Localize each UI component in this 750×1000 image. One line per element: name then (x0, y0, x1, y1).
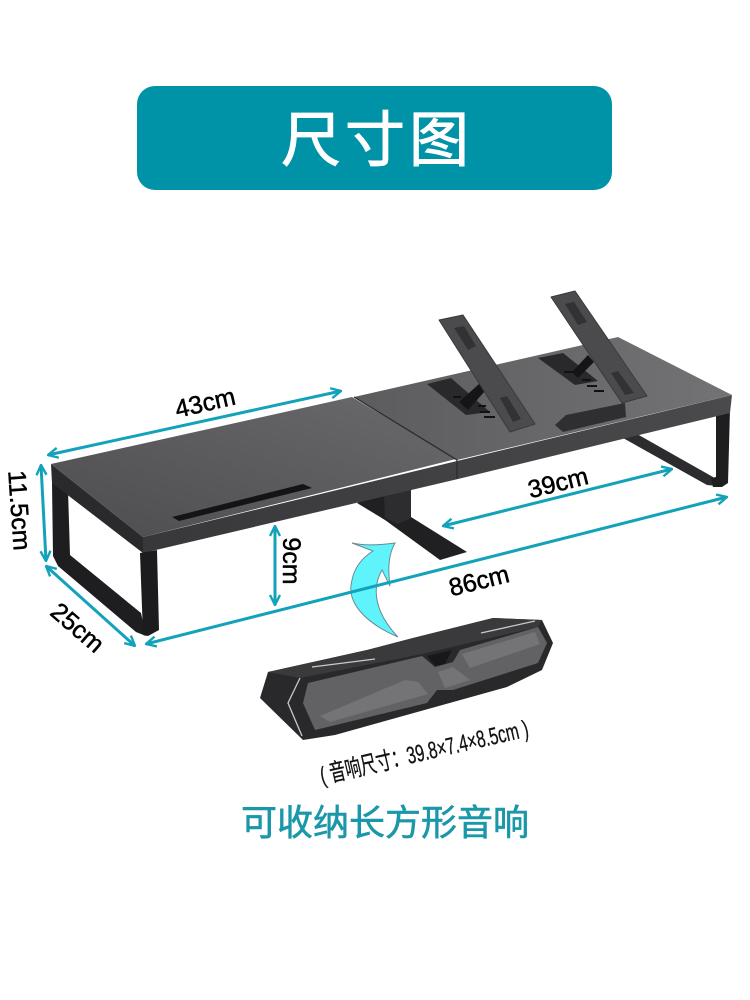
curved upload arrow (351, 543, 398, 637)
laptop stand left (427, 315, 535, 432)
arrow: 43cm (48, 391, 341, 455)
cable slot (172, 484, 312, 521)
label: 43cm: 43cm (172, 383, 238, 424)
center support (357, 487, 467, 560)
arrow: 11.5cm (41, 465, 46, 561)
speaker (260, 618, 553, 740)
dimension arrows (41, 391, 727, 646)
far left leg (52, 483, 146, 636)
title banner: 尺寸图 (281, 107, 473, 174)
label: 9cm: 9cm (277, 537, 305, 585)
label: 39cm: 39cm (525, 462, 591, 504)
label: 86cm: 86cm (446, 560, 512, 602)
tablet holder (555, 403, 626, 432)
label: 11.5cm: 11.5cm (2, 469, 36, 551)
monitor stand (51, 291, 732, 636)
arrow: 25cm (46, 566, 135, 646)
speaker dimensions caption: ( 音响尺寸：39.8×7.4×8.5cm ) (317, 715, 531, 790)
speaker grille (303, 627, 547, 730)
arrow: 86cm (146, 497, 727, 644)
near leg (140, 550, 159, 636)
board front edge (143, 395, 732, 553)
right panel top (354, 337, 732, 460)
arrow: 39cm (443, 469, 672, 526)
label: 25cm: 25cm (45, 597, 110, 659)
far right leg (623, 409, 730, 487)
laptop stand right (538, 291, 647, 403)
grille highlights (320, 632, 540, 722)
title banner (137, 86, 612, 190)
bottom caption: 可收纳长方形音响 (241, 802, 529, 843)
dimension labels (2, 383, 591, 659)
left panel top (51, 397, 456, 537)
light strips (288, 621, 535, 736)
arrow: 9cm (274, 526, 276, 605)
